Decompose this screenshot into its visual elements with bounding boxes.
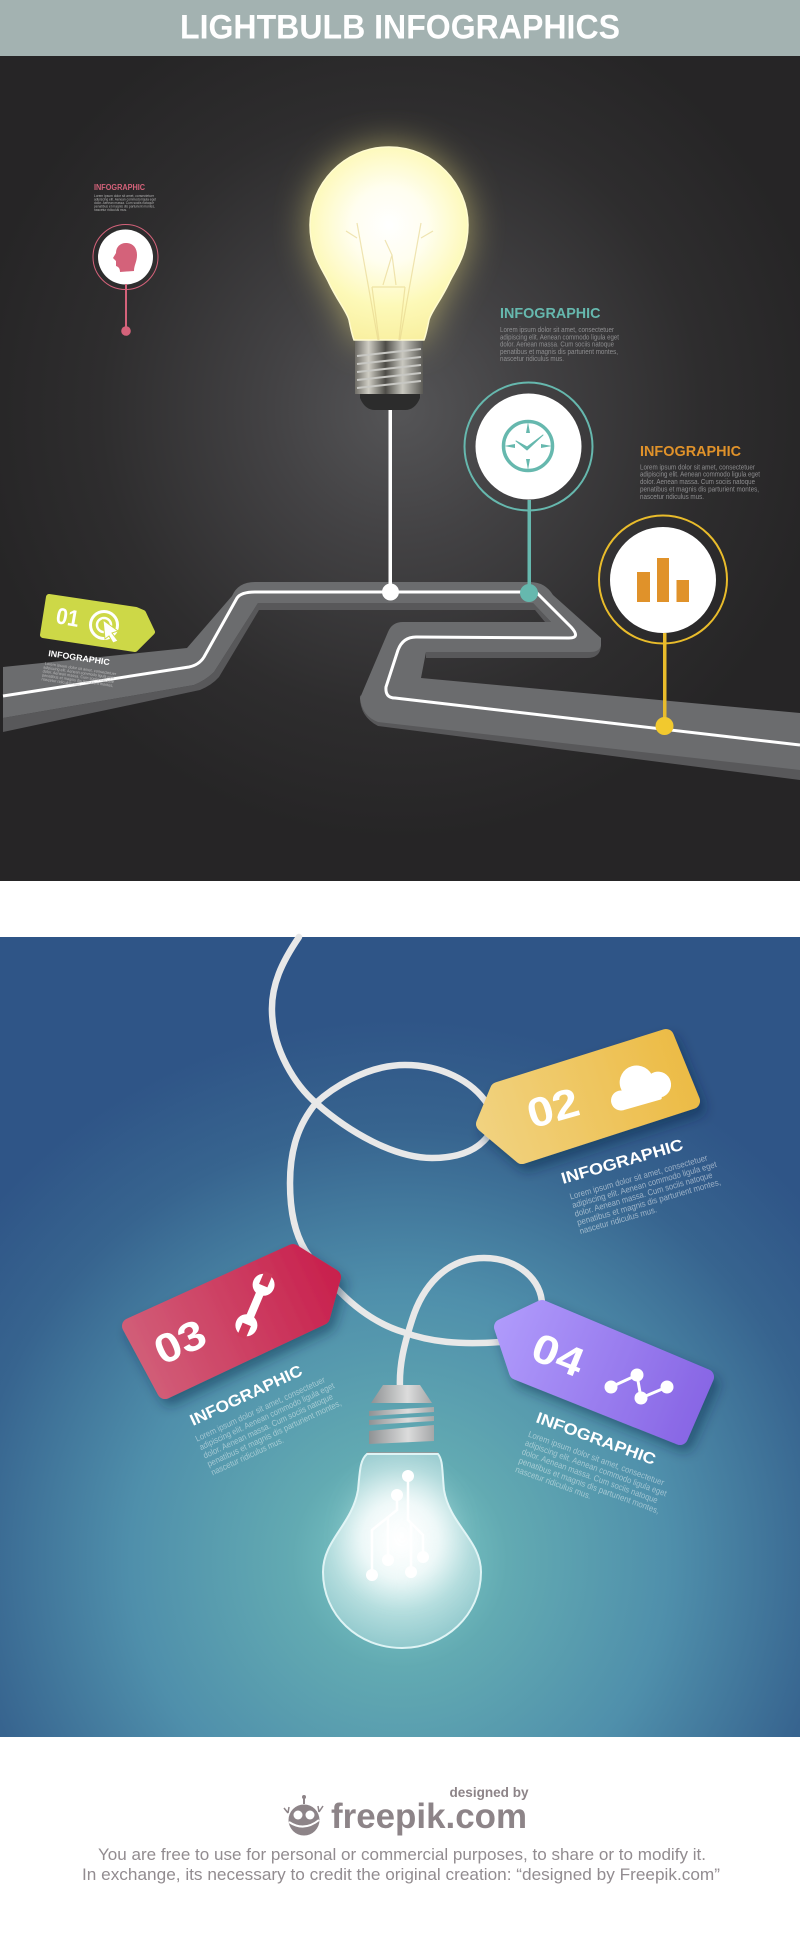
- footer: freepik credit: You are free to use for personal or commercial purposes, to share or to modify it.: [98, 1845, 706, 1864]
- block: tag 02 text: adipiscing elit. Aenean commodo ligula eget: [571, 1159, 718, 1210]
- title banner: LIGHTBULB INFOGRAPHICS: [180, 8, 620, 46]
- panel: blue cable scene: [0, 937, 800, 1737]
- lower bulb: [323, 1385, 481, 1648]
- block: tag 02 text: penatibus et magnis dis parturient montes,: [576, 1177, 722, 1227]
- block: tag 01 text: INFOGRAPHIC: [48, 648, 111, 667]
- block: pink: INFOGRAPHIC: [94, 183, 145, 192]
- block: pink: [94, 183, 156, 212]
- block: teal: nascetur ridiculus mus.: [500, 354, 564, 363]
- block: orange: dolor. Aenean massa. Cum sociis natoque: [640, 477, 755, 486]
- bulb halo: [310, 147, 468, 340]
- block: tag 03 text: penatibus et magnis dis parturient montes,: [205, 1398, 343, 1469]
- block: tag 03 text: Lorem ipsum dolor sit amet, consectetuer: [194, 1374, 327, 1444]
- block: teal: Lorem ipsum dolor sit amet, consectetuer: [500, 325, 614, 334]
- block: tag 04 text: penatibus et magnis dis parturient montes,: [517, 1455, 661, 1516]
- block: teal: [500, 305, 620, 363]
- cord: white: [388, 410, 392, 592]
- bulb screw base: [355, 340, 423, 410]
- block: tag 03 text: INFOGRAPHIC: [188, 1362, 306, 1430]
- block: tag 04 text: dolor. Aenean massa. Cum sociis natoque: [521, 1446, 659, 1505]
- block: tag 02 text: dolor. Aenean massa. Cum sociis natoque: [573, 1170, 714, 1219]
- block: teal: INFOGRAPHIC: [500, 305, 601, 322]
- block: tag 01 text: penatibus et magnis dis parturient montes,: [42, 672, 114, 688]
- block: pink: adipiscing elit. Aenean commodo ligula eget: [94, 198, 156, 202]
- block: pink: penatibus et magnis dis parturient montes,: [94, 204, 155, 208]
- block: tag 01 text: Lorem ipsum dolor sit amet, consectetuer: [45, 661, 117, 676]
- block: tag 02 text: INFOGRAPHIC: [559, 1137, 686, 1188]
- lower bulb glass: [323, 1454, 481, 1648]
- block: tag 01 text: nascetur ridiculus mus.: [41, 676, 81, 687]
- tag 03: 03: [147, 1310, 213, 1374]
- block: tag 01 text: adipiscing elit. Aenean commodo ligula eget: [43, 664, 116, 680]
- title banner: [0, 0, 800, 56]
- block: tag 04 text: [514, 1409, 679, 1525]
- tag 02: 02: [522, 1079, 584, 1137]
- icon: target cursor: [90, 612, 118, 643]
- icon: nodes: [604, 1368, 674, 1404]
- block: orange: penatibus et magnis dis parturient montes,: [640, 484, 759, 494]
- panel: dark road scene: [0, 56, 800, 881]
- block: tag 04 text: INFOGRAPHIC: [534, 1410, 658, 1469]
- block: tag 04 text: nascetur ridiculus mus.: [514, 1464, 593, 1501]
- block: teal: adipiscing elit. Aenean commodo ligula eget: [500, 332, 620, 342]
- icon: clock: [504, 422, 552, 470]
- tag 01: [43, 597, 152, 649]
- block: tag 02 text: nascetur ridiculus mus.: [578, 1204, 658, 1236]
- main bulb: [310, 147, 468, 410]
- cable: [272, 937, 542, 1388]
- circuit filament: [366, 1470, 429, 1581]
- block: tag 02 text: [559, 1129, 726, 1237]
- marker: yellow chart: [599, 516, 727, 735]
- tag 03: [130, 1252, 333, 1391]
- block: pink: Lorem ipsum dolor sit amet, consectetuer: [94, 194, 155, 198]
- tag 04: 04: [525, 1324, 591, 1386]
- dark background: [0, 56, 800, 881]
- marker: teal clock: [464, 382, 592, 602]
- tag 02: [484, 1037, 692, 1156]
- marker: pink head: [93, 224, 158, 336]
- block: orange: nascetur ridiculus mus.: [640, 492, 704, 501]
- icon: cloud: [603, 1057, 675, 1113]
- block: pink: dolor. Aenean massa. Cum sociis natoque: [94, 201, 154, 205]
- road: [3, 582, 800, 780]
- block: orange: [640, 443, 761, 501]
- block: pink: nascetur ridiculus mus.: [94, 208, 127, 212]
- block: teal: dolor. Aenean massa. Cum sociis natoque: [500, 340, 614, 348]
- block: orange: adipiscing elit. Aenean commodo ligula eget: [640, 470, 761, 478]
- icon: head: [113, 243, 137, 272]
- bulb inner glow: [360, 1485, 444, 1585]
- block: tag 03 text: adipiscing elit. Aenean commodo ligula eget: [198, 1380, 336, 1452]
- filament: [346, 223, 433, 340]
- tag 04: [502, 1308, 706, 1437]
- icon: wrench: [231, 1268, 279, 1342]
- icon: bar chart: [637, 558, 689, 602]
- block: orange: INFOGRAPHIC: [640, 443, 741, 460]
- lower bulb cap: [367, 1385, 438, 1455]
- block: tag 03 text: nascetur ridiculus mus.: [209, 1435, 285, 1477]
- footer: freepik credit: In exchange, its necessary to credit the original creation: “designed by Freepik.com”: [82, 1865, 720, 1884]
- block: tag 01 text: dolor. Aenean massa. Cum sociis natoque: [42, 668, 115, 684]
- footer: freepik credit: freepik.com: [331, 1797, 527, 1836]
- block: tag 04 text: Lorem ipsum dolor sit amet, consectetuer: [527, 1429, 666, 1488]
- block: tag 03 text: [185, 1353, 348, 1477]
- icon: freepik robot: [284, 1795, 323, 1836]
- block: tag 01 text: [41, 648, 119, 692]
- block: tag 02 text: Lorem ipsum dolor sit amet, consectetuer: [568, 1152, 709, 1201]
- dot: white: [382, 584, 399, 600]
- footer: freepik credit: designed by: [450, 1784, 529, 1800]
- block: teal: penatibus et magnis dis parturient montes,: [500, 347, 618, 356]
- footer: freepik credit: [82, 1784, 720, 1884]
- blue background: [0, 937, 800, 1737]
- tag 01: 01: [54, 602, 81, 632]
- block: orange: Lorem ipsum dolor sit amet, consectetuer: [640, 462, 755, 472]
- block: tag 03 text: dolor. Aenean massa. Cum sociis natoque: [202, 1391, 335, 1460]
- block: tag 04 text: adipiscing elit. Aenean commodo ligula eget: [524, 1438, 669, 1499]
- bulb glass: [310, 147, 468, 340]
